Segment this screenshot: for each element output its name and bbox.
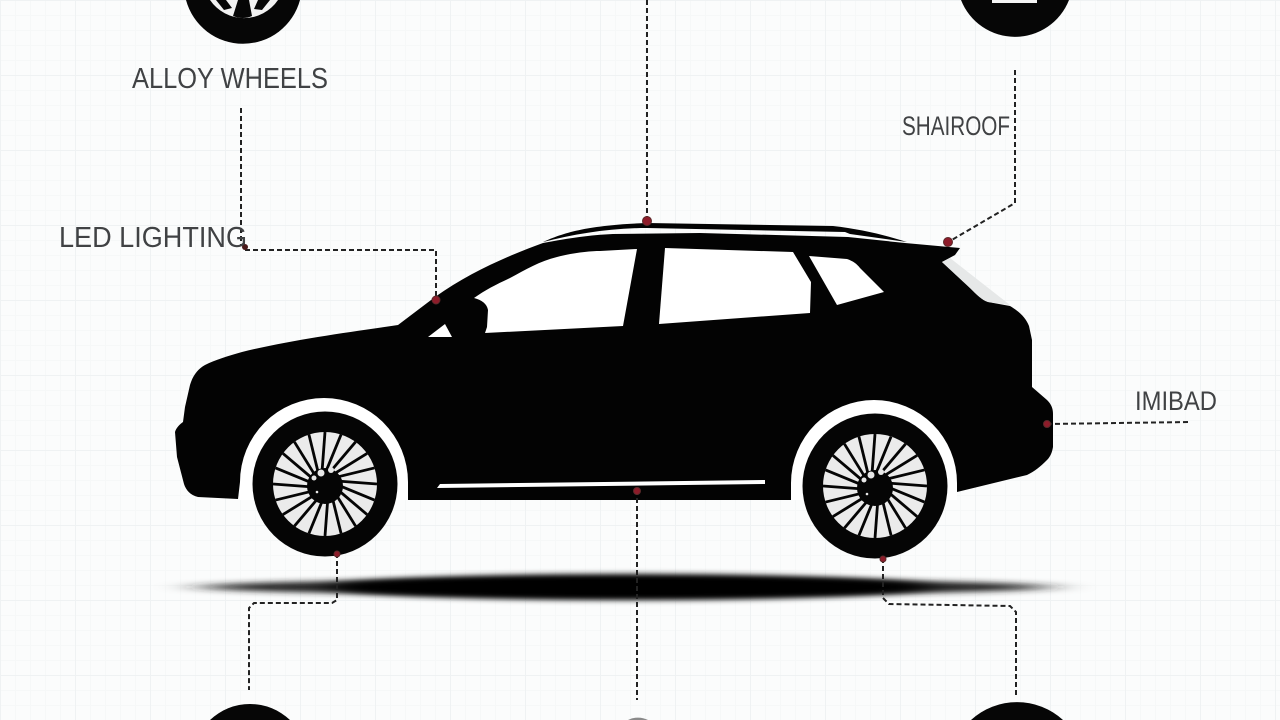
rear wheel: [802, 414, 948, 558]
roof rail: [543, 223, 907, 242]
marker: roof: [642, 216, 652, 226]
label: alloy wheels: ALLOY WHEELS: [132, 63, 328, 95]
marker: front wheel: [334, 551, 340, 557]
icon: bottom right circle: [971, 702, 1063, 720]
icon: alloy wheel circle: [186, 0, 300, 44]
rear strip highlight: [942, 258, 1010, 305]
marker: LED end: [242, 244, 248, 250]
car silhouette: [175, 223, 1053, 500]
connector: alloy wheels: [240, 108, 242, 245]
front wheel: [252, 412, 398, 556]
marker: rear roof: [944, 238, 952, 246]
label: IMIBAD: IMIBAD: [1135, 386, 1217, 416]
marker: rear wheel: [880, 556, 886, 562]
icon: sunroof circle: [961, 0, 1069, 37]
connector: bottom centre: [636, 490, 638, 700]
connector: bottom right: [883, 558, 1016, 695]
icon: bottom left circle: [210, 704, 290, 720]
car body: [175, 233, 1053, 500]
label: sunroof: SHAIROOF: [902, 111, 1010, 141]
ground shadow: [200, 574, 1050, 600]
connector: IMIBAD: [1047, 422, 1190, 424]
rear window: [809, 256, 884, 305]
marker: sill: [634, 488, 640, 494]
quarter glass: [428, 324, 452, 337]
connector: sunroof: [950, 70, 1015, 241]
marker: hood: [432, 296, 440, 304]
icon: bottom centre circle: [628, 718, 648, 720]
connector: bottom left: [249, 553, 337, 690]
wheel arches: [240, 398, 957, 500]
sill highlight: [437, 480, 765, 488]
front window: [474, 249, 637, 333]
connector: top centre: [646, 0, 648, 220]
marker: rear bumper: [1044, 420, 1050, 428]
connector: LED lighting: [245, 250, 436, 298]
middle window: [659, 248, 811, 324]
label: LED lighting: LED LIGHTING: [59, 222, 247, 254]
